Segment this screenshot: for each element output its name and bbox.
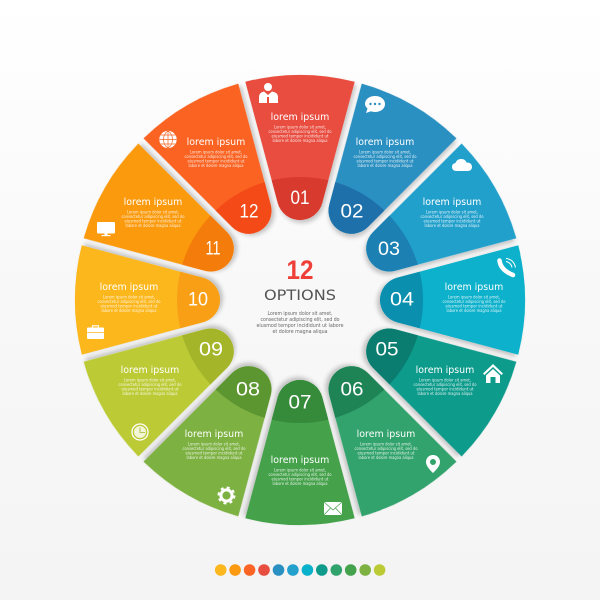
icon: clock xyxy=(132,424,148,440)
segment 02: consectetur adipiscing elit, sed do xyxy=(354,154,417,160)
segment 11: labore et dolore magna aliqua xyxy=(126,223,181,229)
segment 09: consectetur adipiscing elit, sed do xyxy=(118,382,182,388)
segment 02: eiusmod tempor incididunt ut xyxy=(356,158,414,164)
icon: map pin xyxy=(426,455,440,473)
segment 12: 12 xyxy=(240,202,258,222)
segment 10: eiusmod tempor incididunt ut xyxy=(100,304,158,310)
center description: eiusmod tempor incididunt ut labore xyxy=(256,323,344,329)
icon: envelope xyxy=(324,502,342,515)
segment 11: eiusmod tempor incididunt ut xyxy=(124,218,182,224)
center description xyxy=(256,311,344,335)
segment 01: 01 xyxy=(290,188,310,209)
icon: briefcase xyxy=(87,326,104,339)
segment 05: Lorem ipsum dolor sit amet, xyxy=(419,378,471,384)
segment 08 xyxy=(140,342,307,522)
segment 10: 10 xyxy=(188,290,208,310)
segment 02 xyxy=(293,78,460,258)
segment 03: labore et dolore magna aliqua xyxy=(424,223,480,229)
segment 12: lorem ipsum xyxy=(187,137,245,148)
segment 03: Lorem ipsum dolor sit amet, xyxy=(426,210,478,216)
segment 10: consectetur adipiscing elit, sed do xyxy=(98,299,161,305)
icon: cloud xyxy=(452,159,472,171)
segment 04: consectetur adipiscing elit, sed do xyxy=(442,299,506,305)
segment 02: Lorem ipsum dolor sit amet, xyxy=(359,150,411,156)
segment 02: 02 xyxy=(340,202,364,222)
segment 04: labore et dolore magna aliqua xyxy=(446,308,502,314)
segment 11: Lorem ipsum dolor sit amet, xyxy=(127,210,179,216)
segment 09: Lorem ipsum dolor sit amet, xyxy=(124,378,176,384)
segment 07: lorem ipsum xyxy=(271,455,329,466)
center title xyxy=(256,255,344,335)
segment 01: Lorem ipsum dolor sit amet, xyxy=(274,124,326,130)
segment 06 xyxy=(293,342,460,522)
segment 03: lorem ipsum xyxy=(423,197,481,208)
segment 09: 09 xyxy=(199,340,223,360)
segment 03: eiusmod tempor incididunt ut xyxy=(424,218,481,224)
title number: 12 xyxy=(286,255,314,285)
segment 04: lorem ipsum xyxy=(445,282,503,293)
segment 06: lorem ipsum xyxy=(357,429,415,440)
segment 08: consectetur adipiscing elit, sed do xyxy=(182,446,246,452)
icon: gear xyxy=(218,488,234,504)
center description: et dolore magna aliqua xyxy=(272,329,328,335)
segment 04: 04 xyxy=(390,290,414,310)
segment 06: labore et dolore magna aliqua xyxy=(358,455,414,461)
segment 04: Lorem ipsum dolor sit amet, xyxy=(448,294,500,300)
segment 10: labore et dolore magna aliqua xyxy=(102,308,157,314)
segment 10: lorem ipsum xyxy=(100,282,158,293)
icon: globe xyxy=(159,131,177,148)
segment 07 xyxy=(245,380,355,525)
segment 06: 06 xyxy=(340,380,364,400)
segment 07: Lorem ipsum dolor sit amet, xyxy=(274,468,326,474)
center description: consectetur adipiscing elit, sed do xyxy=(260,317,340,323)
segment 05: 05 xyxy=(376,340,398,360)
segment 12 xyxy=(140,78,307,258)
segment 12: consectetur adipiscing elit, sed do xyxy=(184,154,248,160)
title word: OPTIONS xyxy=(264,287,336,304)
segment 11 xyxy=(78,140,258,307)
segment 03: consectetur adipiscing elit, sed do xyxy=(420,214,484,220)
segment 05 xyxy=(342,293,522,460)
segment 01: consectetur adipiscing elit, sed do xyxy=(268,129,332,135)
segment 05: consectetur adipiscing elit, sed do xyxy=(414,382,477,388)
segment 07: labore et dolore magna aliqua xyxy=(272,481,328,487)
segment 03 xyxy=(342,140,522,307)
icon: monitor xyxy=(97,222,115,236)
segment 05: labore et dolore magna aliqua xyxy=(418,391,473,397)
segment 02: labore et dolore magna aliqua xyxy=(358,163,413,169)
icon: user xyxy=(259,83,278,103)
segment 01: lorem ipsum xyxy=(271,112,329,123)
segment 11: 11 xyxy=(206,238,220,260)
segment 09: eiusmod tempor incididunt ut xyxy=(122,386,179,392)
segment 02: lorem ipsum xyxy=(356,137,414,148)
segment 08: lorem ipsum xyxy=(185,429,243,440)
segment 10: Lorem ipsum dolor sit amet, xyxy=(103,294,155,300)
segment 09: labore et dolore magna aliqua xyxy=(122,391,178,397)
segment 01: eiusmod tempor incididunt ut xyxy=(272,134,329,140)
segment 01 xyxy=(245,75,355,220)
segment 05: eiusmod tempor incididunt ut xyxy=(416,386,474,392)
segment 06: consectetur adipiscing elit, sed do xyxy=(354,446,418,452)
legend dots xyxy=(215,564,385,576)
segment 08: labore et dolore magna aliqua xyxy=(186,455,242,461)
segment 09: lorem ipsum xyxy=(121,365,179,376)
segment 08: Lorem ipsum dolor sit amet, xyxy=(188,442,240,448)
icon: house xyxy=(483,364,503,383)
segment 07: consectetur adipiscing elit, sed do xyxy=(268,472,332,478)
icon: phone xyxy=(500,258,516,275)
segment 07: 07 xyxy=(288,392,312,414)
segment 06: eiusmod tempor incididunt ut xyxy=(358,450,415,456)
segment 10 xyxy=(75,245,220,355)
segment 11: consectetur adipiscing elit, sed do xyxy=(122,214,185,220)
segment 05: lorem ipsum xyxy=(416,365,474,376)
segment 12: eiusmod tempor incididunt ut xyxy=(188,158,245,164)
segment 01: labore et dolore magna aliqua xyxy=(272,138,328,144)
center description: Lorem ipsum dolor sit amet, xyxy=(268,311,333,317)
segment 04: eiusmod tempor incididunt ut xyxy=(446,304,503,310)
segment 08: 08 xyxy=(236,380,260,400)
segment 12: Lorem ipsum dolor sit amet, xyxy=(190,150,242,156)
segment 06: Lorem ipsum dolor sit amet, xyxy=(360,442,412,448)
segment 07: eiusmod tempor incididunt ut xyxy=(272,476,329,482)
segment 03: 03 xyxy=(378,239,400,260)
segment 11: lorem ipsum xyxy=(124,197,182,208)
segment 08: eiusmod tempor incididunt ut xyxy=(186,450,243,456)
segment 09 xyxy=(78,293,258,460)
icon: chat bubble xyxy=(365,96,385,113)
segment 04 xyxy=(380,245,525,355)
segment 12: labore et dolore magna aliqua xyxy=(188,163,244,169)
